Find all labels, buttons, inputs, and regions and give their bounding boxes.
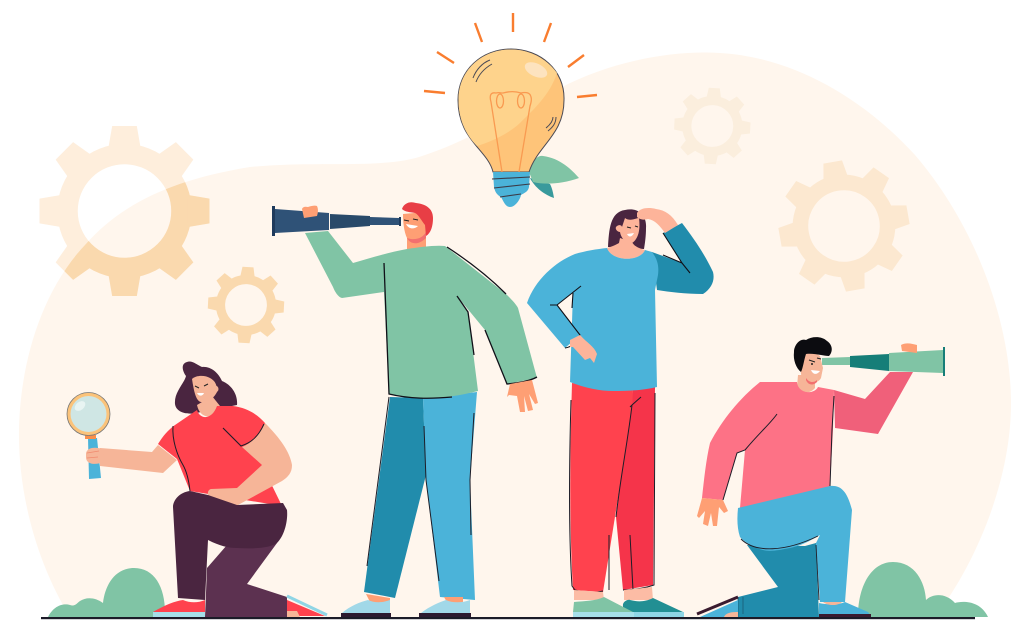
far arm xyxy=(834,372,913,434)
face and neck xyxy=(607,218,645,259)
hand on hip xyxy=(570,335,597,363)
hand on telescope xyxy=(901,343,917,353)
skin and shoes xyxy=(341,594,471,617)
rear lower leg xyxy=(205,543,287,617)
neck and face xyxy=(192,376,220,416)
bent arm xyxy=(208,423,292,506)
hand xyxy=(507,380,538,412)
bulb glass xyxy=(458,49,564,172)
hair xyxy=(402,202,433,236)
person: man with dark telescope xyxy=(272,202,538,617)
shoes xyxy=(697,597,871,617)
leaves xyxy=(529,156,579,198)
gear: large right xyxy=(769,151,919,301)
hand xyxy=(697,498,728,526)
green sweater xyxy=(305,231,537,398)
extended arm and hand xyxy=(86,445,177,473)
pink sweater xyxy=(702,382,834,508)
bush right xyxy=(858,562,988,617)
head xyxy=(797,353,823,392)
front leg xyxy=(737,486,852,602)
bulb base xyxy=(492,172,530,207)
telescope xyxy=(822,347,945,376)
blue sweater xyxy=(527,248,658,391)
gear: large left xyxy=(39,126,209,296)
magnifier xyxy=(67,392,110,479)
shirt xyxy=(158,406,282,506)
hand on telescope xyxy=(302,206,318,218)
person: kneeling man with green telescope xyxy=(697,337,945,617)
person: kneeling woman with magnifier xyxy=(67,362,327,617)
head xyxy=(403,212,428,249)
light bulb idea xyxy=(424,13,597,207)
red trousers xyxy=(570,383,655,592)
ground line xyxy=(41,617,975,619)
sweater lines xyxy=(550,286,581,348)
hair xyxy=(794,337,832,372)
sweater lines xyxy=(384,247,537,398)
front thigh xyxy=(173,491,287,600)
gear: small left xyxy=(206,265,286,345)
feet and shoes xyxy=(573,587,684,617)
hair xyxy=(608,209,646,249)
rear leg xyxy=(738,543,819,617)
telescope xyxy=(272,206,401,236)
bush left xyxy=(48,568,165,617)
bulb rays xyxy=(424,13,597,97)
raised arm xyxy=(652,223,714,294)
raised hand xyxy=(637,208,678,233)
person: woman shading eyes xyxy=(527,208,714,617)
hair xyxy=(175,362,237,414)
gear: small top right xyxy=(672,86,752,166)
legs xyxy=(364,392,477,600)
shoes xyxy=(153,596,327,617)
